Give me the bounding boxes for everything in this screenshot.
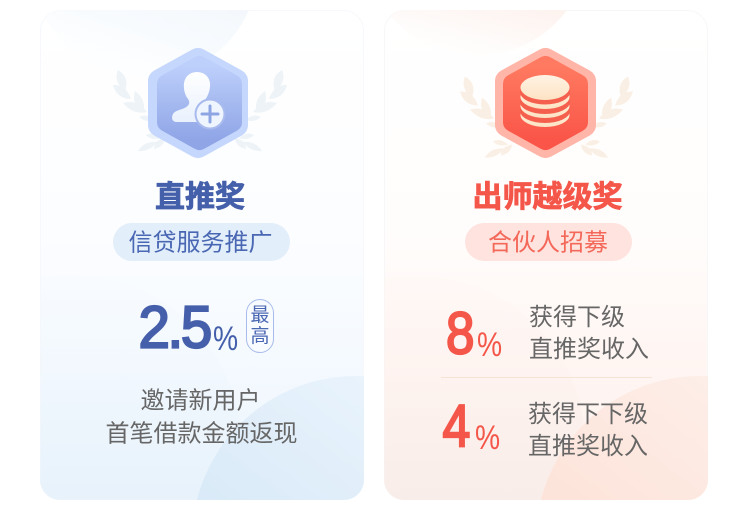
tag: partner recruitment [465, 223, 632, 261]
stat: 8 percent [446, 300, 502, 366]
icon: laurel wreath, peach [460, 76, 633, 158]
stat: 8 percent: % [477, 326, 502, 364]
tag: credit service promotion [113, 223, 290, 261]
text: lower-level direct reward income: 直推奖收入 [529, 336, 649, 363]
text: second-lower-level direct reward income: 获得下下级 [528, 401, 648, 428]
stat: 2.5 percent: % [213, 320, 238, 358]
badge: highest: 最 [250, 305, 270, 326]
text: lower-level direct reward income: 获得下级 [529, 304, 625, 331]
icon: laurel wreath, blue [113, 70, 287, 151]
heading: mentor tier reward: 出师越级奖 [472, 181, 622, 214]
panel: mentor tier reward [384, 10, 708, 500]
text: invite new users description: 邀请新用户 [140, 388, 260, 414]
text: second-lower-level direct reward income [528, 401, 648, 460]
panel: direct referral reward [40, 10, 364, 500]
icon: hexagon badge with person plus [160, 60, 236, 146]
text: invite new users description [106, 388, 298, 448]
tag: credit service promotion: 信贷服务推广 [128, 230, 272, 256]
stat: 2.5 percent: 2.5 [138, 294, 210, 361]
heading: direct referral reward: 直推奖 [155, 181, 245, 214]
badge: highest: 高 [250, 325, 270, 347]
text: second-lower-level direct reward income: 直推奖收入 [528, 433, 648, 460]
stat: 8 percent: 8 [446, 300, 474, 366]
stat: 4 percent: % [475, 419, 500, 457]
text: invite new users description: 首笔借款金额返现 [106, 420, 298, 448]
icon: hexagon badge with coin stack [507, 60, 584, 146]
stat: 4 percent: 4 [442, 392, 470, 459]
badge: highest [246, 300, 274, 352]
stat: 4 percent [442, 392, 500, 459]
text: lower-level direct reward income [529, 304, 649, 363]
tag: partner recruitment: 合伙人招募 [488, 230, 608, 256]
